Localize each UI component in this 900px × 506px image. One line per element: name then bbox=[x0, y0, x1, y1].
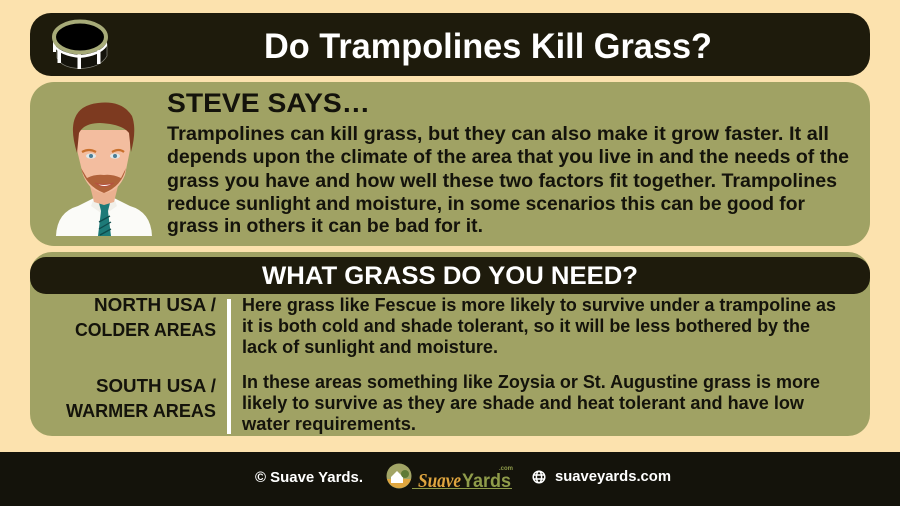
text block: Steve's answer: depends upon the climate of the area that you live in and the needs of the bbox=[167, 147, 849, 168]
website: suaveyards.com bbox=[555, 468, 671, 485]
text block: south advice: In these areas something like Zoysia or St. Augustine grass is more bbox=[242, 372, 820, 392]
text block: Steve's answer: reduce sunlight and moisture, in some scenarios this can be good for bbox=[167, 194, 806, 215]
icon: trampoline bbox=[53, 22, 107, 69]
icon: Steve portrait bbox=[56, 103, 152, 236]
icon: Suave Yards logo bbox=[386, 464, 412, 488]
footer bar bbox=[0, 452, 900, 506]
logo wordmark: Suave bbox=[418, 470, 461, 492]
label: north USA: COLDER AREAS bbox=[75, 320, 216, 340]
heading: Steve says: STEVE SAYS… bbox=[167, 88, 370, 118]
copyright: © Suave Yards. bbox=[255, 470, 363, 486]
label: north USA bbox=[75, 295, 216, 340]
panel: what grass do you need bbox=[30, 252, 870, 436]
logo wordmark bbox=[412, 466, 513, 492]
label: south USA: SOUTH USA / bbox=[96, 376, 216, 396]
text block: south advice: likely to survive as they are shade and heat tolerant and have low bbox=[242, 393, 805, 413]
text block: Steve's answer: Trampolines can kill grass, but they can also make it grow faster. It all bbox=[167, 124, 829, 145]
panel: title banner bbox=[30, 13, 870, 76]
heading bar: WHAT GRASS DO YOU NEED? bbox=[262, 262, 638, 290]
text block: north advice: Here grass like Fescue is more likely to survive under a trampoline as bbox=[242, 295, 836, 315]
text block: north advice bbox=[242, 295, 836, 357]
logo wordmark: .com bbox=[499, 466, 513, 472]
panel: Steve says bbox=[30, 82, 870, 246]
text block: north advice: lack of sunlight and moisture. bbox=[242, 337, 498, 357]
icon: globe bbox=[533, 471, 545, 483]
text block: Steve's answer bbox=[167, 124, 849, 237]
logo wordmark: Yards bbox=[462, 471, 511, 492]
heading bar bbox=[30, 257, 870, 294]
text block: Steve's answer: grass in others it can be bad for it. bbox=[167, 216, 483, 237]
text block: north advice: it is both cold and shade tolerant, so it will be less bothered by the bbox=[242, 316, 810, 336]
text block: south advice: water requirements. bbox=[241, 414, 416, 434]
label: south USA: WARMER AREAS bbox=[66, 401, 216, 421]
text block: Steve's answer: grass you have and how well these two factors fit together. Trampolines bbox=[167, 171, 837, 192]
text block: south advice bbox=[241, 372, 820, 434]
label: north USA: NORTH USA / bbox=[94, 295, 216, 315]
title: Do Trampolines Kill Grass? bbox=[264, 27, 712, 66]
label: south USA bbox=[66, 376, 216, 421]
